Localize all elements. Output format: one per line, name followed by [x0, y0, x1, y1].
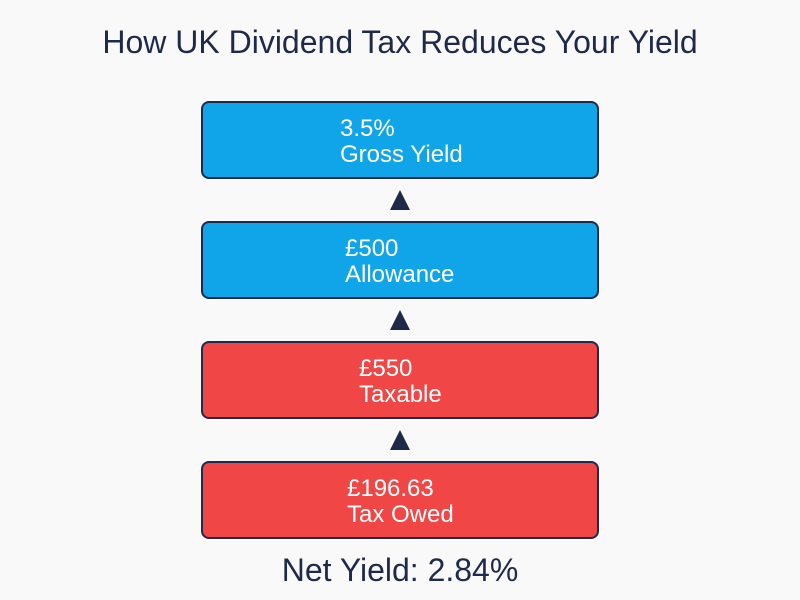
box: taxable — [201, 341, 599, 419]
title: How UK Dividend Tax Reduces Your Yield — [102, 24, 698, 60]
box: tax owed — [201, 461, 599, 539]
box: allowance: £500 — [345, 235, 398, 262]
arrow 2 — [390, 310, 410, 330]
box: allowance: Allowance — [345, 261, 454, 288]
net yield: Net Yield: 2.84% — [282, 552, 518, 588]
box: gross yield — [201, 101, 599, 179]
box: tax owed: £196.63 — [347, 475, 434, 502]
box: gross yield: Gross Yield — [340, 141, 463, 168]
box: allowance — [201, 221, 599, 299]
box: gross yield: 3.5% — [340, 115, 395, 142]
arrow 1 — [390, 190, 410, 210]
box: taxable: £550 — [359, 355, 412, 382]
arrow 3 — [390, 430, 410, 450]
box: tax owed: Tax Owed — [347, 501, 454, 528]
box: taxable: Taxable — [359, 381, 442, 408]
